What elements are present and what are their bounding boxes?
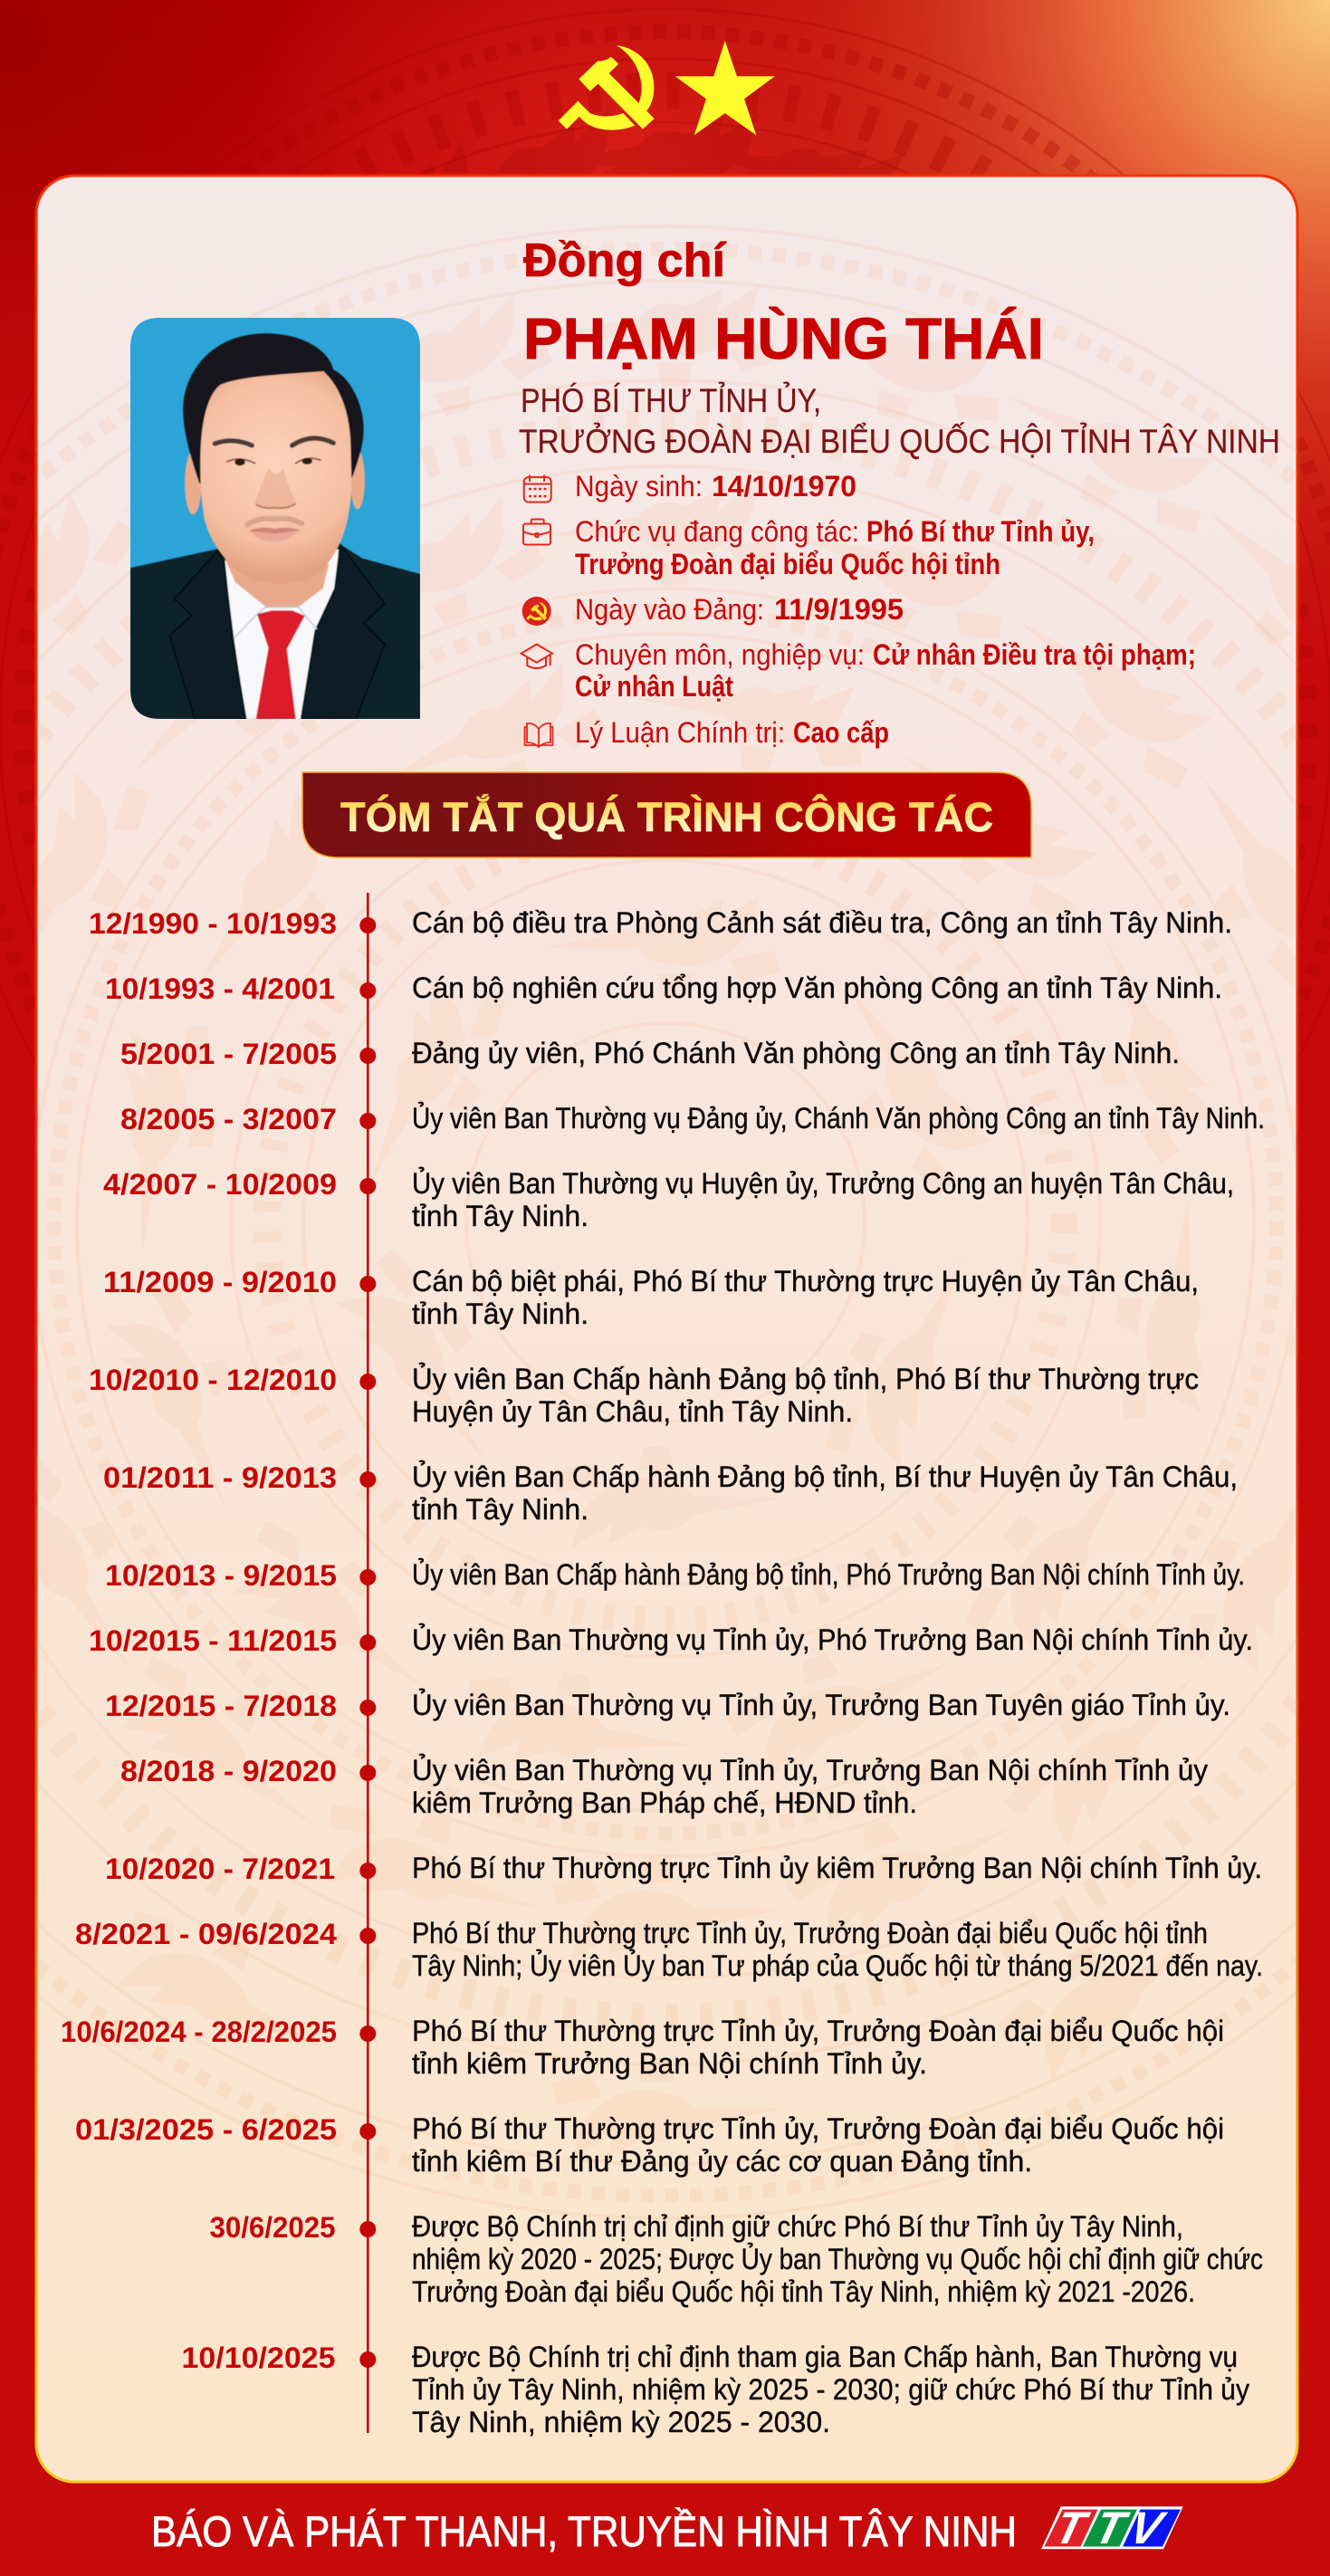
logo: TTV: V <box>1124 2503 1172 2553</box>
neck <box>225 559 329 607</box>
info: date of birth <box>524 470 856 503</box>
footer: organisation name: BÁO VÀ PHÁT THANH, TRUYỀN HÌNH TÂY NINH <box>151 2507 1017 2555</box>
row: 10/2010 - 12/2010: Ủy viên Ban Chấp hành Đảng bộ tỉnh, Phó Bí thư Thường trực <box>412 1363 1199 1395</box>
row: 8/2005 - 3/2007: 8/2005 - 3/2007 <box>120 1103 337 1135</box>
row: 12/1990 - 10/1993 <box>89 906 1232 940</box>
row: 30/6/2025: Được Bộ Chính trị chỉ định giữ chức Phó Bí thư Tỉnh ủy Tây Ninh, <box>412 2210 1183 2243</box>
row: 11/2009 - 9/2010 <box>103 1265 1199 1330</box>
info: political theory: Cao cấp <box>793 716 889 749</box>
info: qualifications: Cử nhân Điều tra tội phạm; <box>873 638 1196 671</box>
row: 10/10/2025: Tây Ninh, nhiệm kỳ 2025 - 2030. <box>412 2406 830 2438</box>
row: 4/2007 - 10/2009 <box>103 1167 1234 1232</box>
row: 01/3/2025 - 6/2025 <box>75 2112 1224 2178</box>
heading: Đồng chí: Đồng chí <box>523 235 727 287</box>
row: 5/2001 - 7/2005: Đảng ủy viên, Phó Chánh Văn phòng Công an tỉnh Tây Ninh. <box>412 1037 1180 1069</box>
info: date of birth: 14/10/1970 <box>712 470 856 503</box>
row: 11/2009 - 9/2010: 11/2009 - 9/2010 <box>103 1266 337 1298</box>
row: 4/2007 - 10/2009: tỉnh Tây Ninh. <box>412 1200 588 1232</box>
icon: calendar <box>524 474 551 502</box>
row: 10/2010 - 12/2010 <box>89 1363 1199 1428</box>
row: 01/2011 - 9/2013: 01/2011 - 9/2013 <box>103 1461 337 1494</box>
logo: TTV: T <box>1050 2503 1094 2553</box>
row: 5/2001 - 7/2005: 5/2001 - 7/2005 <box>120 1038 337 1070</box>
row: 01/3/2025 - 6/2025: Phó Bí thư Thường trực Tỉnh ủy, Trưởng Đoàn đại biểu Quốc hội <box>412 2112 1224 2145</box>
row: 10/2013 - 9/2015: 10/2013 - 9/2015 <box>105 1559 337 1592</box>
row: 10/2010 - 12/2010: 10/2010 - 12/2010 <box>89 1364 337 1396</box>
row: 10/10/2025 <box>181 2341 1249 2438</box>
info: current position: Phó Bí thư Tỉnh ủy, <box>866 515 1095 548</box>
row: 12/2015 - 7/2018 <box>105 1689 1230 1722</box>
row: 8/2018 - 9/2020 <box>120 1754 1208 1819</box>
info: current position: Chức vụ đang công tác: <box>575 515 859 548</box>
row: 8/2021 - 09/6/2024: 8/2021 - 09/6/2024 <box>75 1918 337 1950</box>
icon: party emblem <box>522 597 551 626</box>
row: 01/2011 - 9/2013: Ủy viên Ban Chấp hành Đảng bộ tỉnh, Bí thư Huyện ủy Tân Châu, <box>412 1460 1238 1493</box>
row: 30/6/2025: 30/6/2025 <box>210 2211 335 2244</box>
row: 30/6/2025: Trưởng Đoàn đại biểu Quốc hội tỉnh Tây Ninh, nhiệm kỳ 2021 -2026. <box>412 2275 1195 2308</box>
banner: section heading <box>302 772 1031 857</box>
info: qualifications: Cử nhân Luật <box>575 670 733 703</box>
icon: graduation cap <box>521 645 552 668</box>
row: 5/2001 - 7/2005 <box>120 1037 1180 1070</box>
position subtitle <box>519 381 1280 460</box>
icon: briefcase <box>523 520 550 545</box>
row: 10/2013 - 9/2015 <box>105 1558 1245 1592</box>
logo: TTV <box>1041 2503 1183 2553</box>
row: 12/1990 - 10/1993: Cán bộ điều tra Phòng Cảnh sát điều tra, Công an tỉnh Tây Ninh. <box>412 906 1232 939</box>
ears <box>185 450 365 514</box>
row: 10/1993 - 4/2001 <box>105 972 1222 1005</box>
row: 4/2007 - 10/2009: Ủy viên Ban Thường vụ Huyện ủy, Trưởng Công an huyện Tân Châu, <box>412 1167 1234 1200</box>
info: date of birth: Ngày sinh: <box>575 470 703 503</box>
row: 10/1993 - 4/2001: Cán bộ nghiên cứu tổng hợp Văn phòng Công an tỉnh Tây Ninh. <box>412 972 1222 1004</box>
shirt <box>225 550 339 719</box>
jacket <box>130 544 420 719</box>
row: 10/6/2024 - 28/2/2025: 10/6/2024 - 28/2/2025 <box>61 2016 337 2048</box>
info: qualifications: Chuyên môn, nghiệp vụ: <box>575 638 865 671</box>
position subtitle: PHÓ BÍ THƯ TỈNH ỦY, <box>521 381 821 419</box>
info: current position <box>523 515 1095 580</box>
row: 10/2020 - 7/2021 <box>105 1852 1262 1885</box>
row: 8/2018 - 9/2020: Ủy viên Ban Thường vụ Tỉnh ủy, Trưởng Ban Nội chính Tỉnh ủy <box>412 1754 1208 1786</box>
row: 01/3/2025 - 6/2025: 01/3/2025 - 6/2025 <box>75 2113 337 2146</box>
row: 10/2015 - 11/2015: 10/2015 - 11/2015 <box>89 1624 337 1657</box>
row: 01/3/2025 - 6/2025: tỉnh kiêm Bí thư Đảng ủy các cơ quan Đảng tỉnh. <box>412 2145 1032 2178</box>
row: 01/2011 - 9/2013 <box>103 1460 1238 1526</box>
timeline axis <box>367 893 369 2433</box>
row: 10/10/2025: Tỉnh ủy Tây Ninh, nhiệm kỳ 2025 - 2030; giữ chức Phó Bí thư Tỉnh ủy <box>412 2373 1249 2406</box>
heading: name: PHẠM HÙNG THÁI <box>523 306 1044 371</box>
hair <box>183 333 364 486</box>
timeline <box>61 893 1265 2438</box>
icon: yellow star <box>675 41 775 135</box>
row: 4/2007 - 10/2009: 4/2007 - 10/2009 <box>103 1168 337 1201</box>
info: party admission date: Ngày vào Đảng: <box>575 593 764 626</box>
row: 01/2011 - 9/2013: tỉnh Tây Ninh. <box>412 1493 588 1526</box>
icon: hammer and sickle <box>559 45 655 130</box>
row: 10/2020 - 7/2021: Phó Bí thư Thường trực Tỉnh ủy kiêm Trưởng Ban Nội chính Tỉnh ủy. <box>412 1852 1262 1884</box>
row: 11/2009 - 9/2010: tỉnh Tây Ninh. <box>412 1298 588 1330</box>
row: 10/2020 - 7/2021: 10/2020 - 7/2021 <box>105 1853 335 1885</box>
row: 8/2018 - 9/2020: kiêm Trưởng Ban Pháp chế, HĐND tỉnh. <box>412 1786 917 1819</box>
row: 8/2018 - 9/2020: 8/2018 - 9/2020 <box>120 1755 337 1787</box>
row: 12/2015 - 7/2018: 12/2015 - 7/2018 <box>105 1690 337 1722</box>
row: 10/2015 - 11/2015 <box>89 1623 1253 1657</box>
row: 10/10/2025: 10/10/2025 <box>181 2341 335 2374</box>
info: party admission date <box>522 593 904 626</box>
face <box>200 371 351 584</box>
row: 30/6/2025 <box>210 2210 1263 2308</box>
row: 11/2009 - 9/2010: Cán bộ biệt phái, Phó Bí thư Thường trực Huyện ủy Tân Châu, <box>412 1265 1199 1298</box>
info: qualifications <box>521 638 1196 703</box>
info: political theory: Lý Luận Chính trị: <box>575 716 785 749</box>
row: 8/2021 - 09/6/2024 <box>75 1917 1263 1982</box>
banner: section heading: TÓM TẮT QUÁ TRÌNH CÔNG TÁC <box>340 794 993 840</box>
info: party admission date: 11/9/1995 <box>774 593 904 626</box>
logo: TTV: T <box>1090 2503 1134 2553</box>
row: 10/2010 - 12/2010: Huyện ủy Tân Châu, tỉnh Tây Ninh. <box>412 1395 853 1428</box>
portrait photo <box>130 318 420 719</box>
shirt collar shadow <box>234 608 317 638</box>
row: 10/10/2025: Được Bộ Chính trị chỉ định tham gia Ban Chấp hành, Ban Thường vụ <box>412 2341 1238 2373</box>
row: 12/2015 - 7/2018: Ủy viên Ban Thường vụ Tỉnh ủy, Trưởng Ban Tuyên giáo Tỉnh ủy. <box>412 1689 1230 1721</box>
row: 10/6/2024 - 28/2/2025 <box>61 2015 1224 2080</box>
row: 10/2015 - 11/2015: Ủy viên Ban Thường vụ Tỉnh ủy, Phó Trưởng Ban Nội chính Tỉnh ủy. <box>412 1623 1253 1656</box>
facial features <box>215 438 333 464</box>
info: political theory <box>525 716 889 749</box>
row: 10/6/2024 - 28/2/2025: tỉnh kiêm Trưởng Ban Nội chính Tỉnh ủy. <box>412 2047 927 2080</box>
row: 8/2021 - 09/6/2024: Phó Bí thư Thường trực Tỉnh ủy, Trưởng Đoàn đại biểu Quốc hội tỉnh <box>412 1917 1208 1949</box>
jacket lapels <box>169 545 385 719</box>
info: current position: Trưởng Đoàn đại biểu Quốc hội tỉnh <box>575 548 1000 580</box>
icon: open book <box>525 723 552 747</box>
tie <box>256 610 305 719</box>
row: 12/1990 - 10/1993: 12/1990 - 10/1993 <box>89 907 337 940</box>
row: 10/6/2024 - 28/2/2025: Phó Bí thư Thường trực Tỉnh ủy, Trưởng Đoàn đại biểu Quốc hội <box>412 2015 1224 2047</box>
row: 10/1993 - 4/2001: 10/1993 - 4/2001 <box>105 972 335 1005</box>
row: 8/2005 - 3/2007 <box>120 1102 1265 1135</box>
